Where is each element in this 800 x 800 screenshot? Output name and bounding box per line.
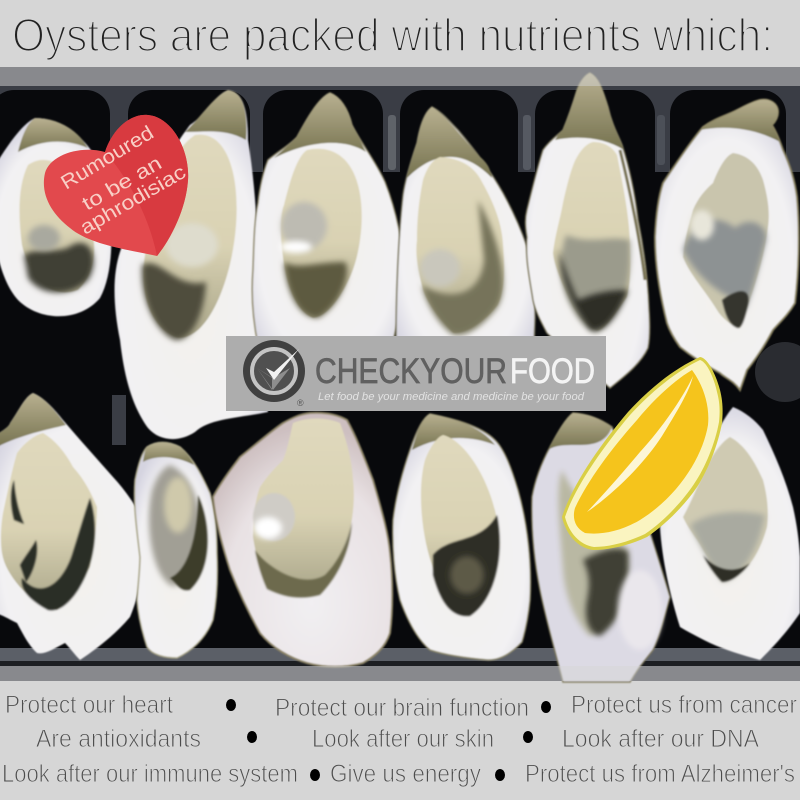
- row 3: Look after our immune system: [2, 760, 298, 788]
- heart callout: [44, 115, 190, 256]
- row 2: Look after our skin: [312, 725, 494, 753]
- oyster 7: [0, 393, 152, 660]
- logo wordmark: CHECKYOUR: [315, 352, 507, 391]
- row 1: Protect our brain function: [275, 694, 529, 722]
- tray compartments: [0, 90, 800, 648]
- lemon wedge: [562, 357, 723, 550]
- logo banner: FOOD: [510, 352, 595, 391]
- row 2: [36, 725, 759, 753]
- oyster 11: [532, 413, 670, 682]
- translucent tray edge bands: [0, 67, 800, 681]
- heart callout: to be an: [78, 152, 166, 215]
- oyster 5: [526, 73, 650, 388]
- heart callout: Rumoured: [57, 122, 158, 194]
- oyster 3: [252, 93, 404, 345]
- oyster 8: [134, 442, 217, 658]
- oyster 12: [660, 407, 800, 660]
- logo banner: ®: [297, 398, 304, 408]
- oyster 1: [0, 118, 111, 316]
- benefits list: [2, 691, 797, 788]
- row 2: Are antioxidants: [36, 725, 201, 753]
- row 1: Protect our heart: [5, 691, 173, 719]
- photo: oyster tray: [0, 67, 800, 682]
- row 3: [2, 760, 795, 788]
- oyster 6: [655, 100, 799, 390]
- icon: checkmark badge: [243, 340, 305, 402]
- oyster 9: [213, 413, 392, 667]
- row 3: Give us energy: [330, 760, 481, 788]
- heart callout: aphrodisiac: [76, 161, 190, 239]
- oyster 10: [393, 414, 530, 660]
- oyster 2: [115, 90, 268, 439]
- row 1: [5, 691, 797, 722]
- logo banner: Let food be your medicine and medicine be your food: [318, 391, 585, 403]
- row 2: Look after our DNA: [562, 725, 759, 753]
- oyster 4: [396, 107, 535, 345]
- logo banner: [226, 336, 606, 411]
